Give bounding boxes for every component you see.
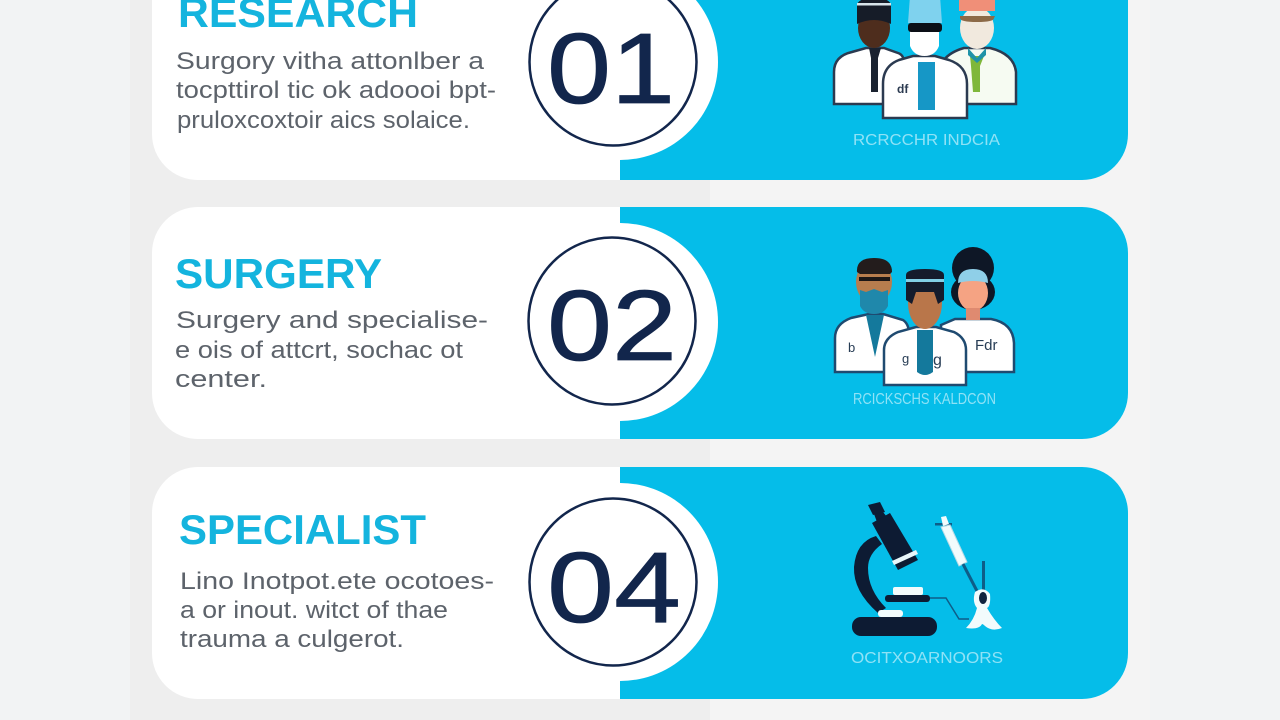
heading: specialist: SPECIALIST (179, 506, 426, 553)
panel: specialist (152, 467, 1128, 699)
icon: surgical team (835, 247, 1014, 385)
text block: specialist description: a or inout. witct of thae (180, 597, 448, 624)
icon: three doctors (834, 0, 1016, 118)
center surgeon: g (933, 352, 942, 369)
caption: surgery icon: RCICKSCHS KALDCON (853, 391, 996, 408)
text block: surgery description: center. (175, 366, 267, 393)
right surgeon: Fdr (975, 337, 998, 354)
right surgeon (941, 247, 1014, 372)
icon: microscope and pipette (852, 502, 1002, 636)
left surgeon: b (848, 340, 855, 355)
panel: surgery (152, 207, 1128, 439)
caption: specialist icon: OCITXOARNOORS (851, 650, 1003, 667)
panel: research (152, 0, 1128, 180)
left doctor (834, 0, 904, 104)
center doctor: df (897, 82, 909, 96)
text block: surgery description (175, 307, 488, 393)
center surgeon: g (902, 351, 909, 366)
microscope (852, 502, 937, 636)
text block: specialist description (180, 568, 494, 653)
right doctor (944, 0, 1016, 104)
text block: surgery description: e ois of attcrt, sochac ot (175, 337, 463, 364)
text block: research description: Surgory vitha attonlber a (176, 48, 485, 75)
center surgeon (884, 269, 966, 385)
left surgeon (835, 258, 909, 372)
pipette (930, 516, 1002, 630)
caption: research icon: RCRCCHR INDCIA (853, 132, 1000, 149)
center doctor (883, 0, 967, 118)
text block: research description: pruloxcoxtoir aics solaice. (177, 107, 470, 134)
number badge 02: 02 (547, 270, 677, 382)
text block: research description (176, 48, 496, 134)
number badge 02 (528, 238, 696, 404)
number badge 04: 04 (547, 532, 681, 644)
text block: surgery description: Surgery and specialise- (176, 307, 488, 334)
number badge 04 (530, 498, 696, 666)
text block: specialist description: Lino Inotpot.ete ocotoes- (180, 568, 494, 595)
number badge 01: 01 (547, 13, 675, 125)
heading: surgery: SURGERY (175, 250, 382, 297)
number badge 01 (530, 0, 696, 146)
text block: research description: tocpttirol tic ok adoooi bpt- (176, 77, 496, 104)
text block: specialist description: trauma a culgerot. (180, 626, 404, 653)
